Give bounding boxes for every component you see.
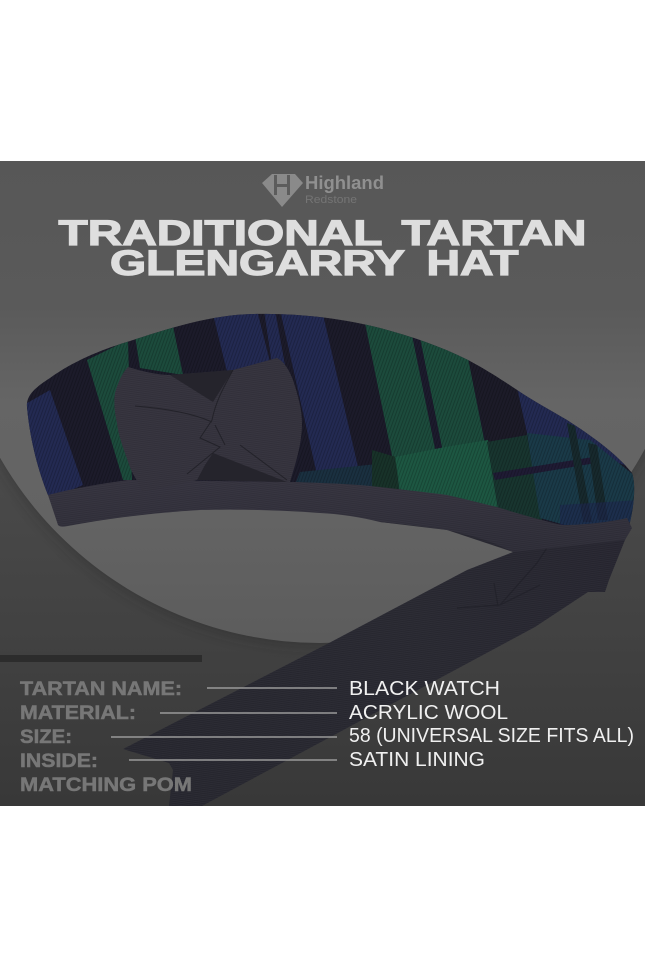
dark thin stripe bbox=[412, 338, 442, 449]
hat brim band bbox=[48, 480, 632, 552]
spec labels: INSIDE: bbox=[20, 751, 98, 772]
title: HAT bbox=[426, 244, 518, 283]
spec labels bbox=[20, 679, 192, 796]
spec values: BLACK WATCH bbox=[349, 678, 500, 700]
light circle behind hat bbox=[0, 161, 645, 643]
logo bbox=[262, 173, 384, 207]
hat bow bbox=[114, 358, 302, 492]
spec values: 58 (UNIVERSAL SIZE FITS ALL) bbox=[349, 725, 634, 747]
spec values bbox=[349, 678, 634, 771]
right dark check bbox=[468, 360, 520, 401]
green stripes bbox=[87, 324, 484, 490]
spec labels: TARTAN NAME: bbox=[20, 679, 182, 700]
logo: Highland bbox=[305, 173, 384, 193]
hat ribbon tail bbox=[123, 510, 630, 806]
background panel bbox=[0, 161, 645, 806]
spec labels: MATERIAL: bbox=[20, 703, 136, 724]
spec values: ACRYLIC WOOL bbox=[349, 702, 508, 724]
divider bar bbox=[0, 655, 202, 662]
title bbox=[58, 214, 586, 283]
horizontal checks bbox=[296, 464, 372, 486]
blue stripes bbox=[20, 310, 640, 500]
hat tartan crown bbox=[26, 314, 634, 525]
logo: Redstone bbox=[305, 194, 357, 206]
spec labels: SIZE: bbox=[20, 727, 72, 748]
spec labels: MATCHING POM bbox=[20, 775, 192, 796]
title: GLENGARRY bbox=[110, 244, 405, 283]
spec values: SATIN LINING bbox=[349, 749, 485, 771]
title: TRADITIONAL bbox=[58, 214, 382, 253]
connector lines bbox=[111, 688, 337, 760]
title: TARTAN bbox=[402, 214, 586, 253]
